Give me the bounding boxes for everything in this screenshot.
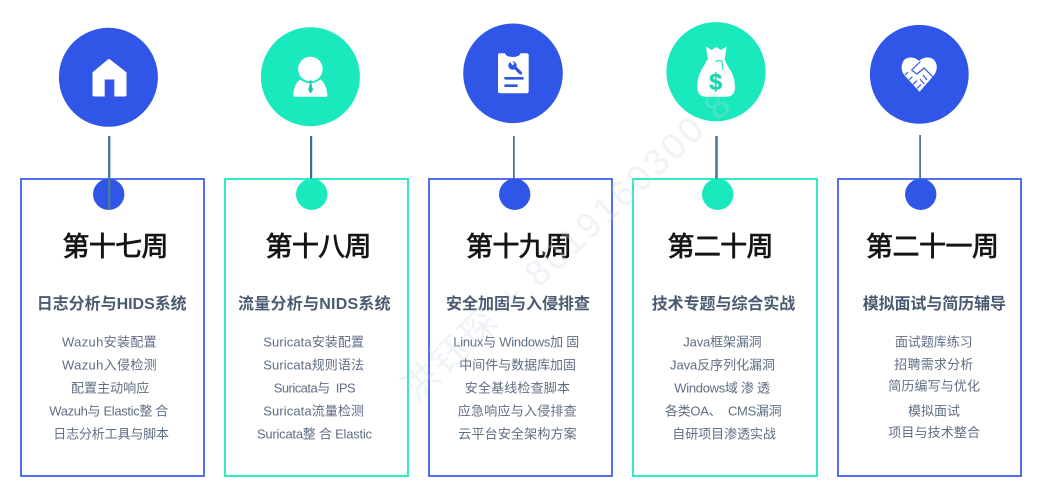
card: week 17 bbox=[21, 179, 204, 476]
icon circle: person bbox=[261, 27, 360, 126]
connector line bbox=[513, 136, 515, 180]
column: week 20 bbox=[633, 22, 817, 476]
topic list: 自研项目渗透实战 bbox=[672, 426, 776, 442]
icon circle: money bag: $ bbox=[709, 69, 722, 95]
topic list bbox=[453, 334, 579, 442]
connector dot bbox=[296, 179, 327, 210]
topic list: Suricata安装配置 bbox=[263, 334, 364, 350]
heading: week 17: 第十七周 bbox=[62, 232, 168, 262]
icon circle: home bbox=[59, 28, 158, 127]
topic list: 模拟面试 bbox=[908, 404, 960, 418]
topic list bbox=[257, 334, 372, 442]
connector dot bbox=[93, 179, 124, 210]
heading: week 18: 第十八周 bbox=[266, 232, 372, 262]
topic list: 招聘需求分析 bbox=[894, 357, 973, 372]
card: week 20 bbox=[633, 179, 817, 476]
icon circle: clipboard with wrench bbox=[463, 24, 563, 123]
topic list: 配置主动响应 bbox=[71, 380, 149, 396]
card: week 19 bbox=[429, 179, 612, 476]
topic list: 中间件与数据库加固 bbox=[459, 358, 576, 372]
column: week 17 bbox=[21, 28, 204, 476]
topic list bbox=[665, 334, 782, 442]
topic list: 安全基线检查脚本 bbox=[465, 380, 570, 396]
topic list: 面试题库练习 bbox=[895, 334, 973, 350]
column: week 21 bbox=[838, 25, 1021, 476]
topic list: 日志分析工具与脚本 bbox=[53, 426, 169, 442]
topic list: Wazuh与 Elastic整 合 bbox=[49, 404, 168, 418]
connector line bbox=[108, 136, 110, 210]
card: week 18 bbox=[225, 179, 408, 476]
heading: week 19: 第十九周 bbox=[466, 232, 572, 262]
topic list: Wazuh入侵检测 bbox=[62, 358, 157, 372]
connector dot bbox=[905, 179, 936, 210]
topic list: 项目与技术整合 bbox=[888, 425, 980, 440]
column: week 18 bbox=[225, 27, 408, 476]
subheading: 流量分析与NIDS系统 bbox=[238, 294, 391, 313]
topic list: 各类OA、 CMS漏洞 bbox=[665, 404, 782, 418]
topic list: Linux与 Windows加 固 bbox=[453, 334, 579, 350]
topic list bbox=[49, 334, 169, 442]
heading: week 21: 第二十一周 bbox=[866, 232, 999, 262]
connector line bbox=[919, 135, 921, 180]
topic list: 云平台安全架构方案 bbox=[458, 426, 577, 442]
connector line bbox=[310, 136, 312, 180]
subheading: 技术专题与综合实战 bbox=[652, 294, 795, 313]
topic list: Suricata整 合 Elastic bbox=[257, 426, 372, 442]
topic list: Wazuh安装配置 bbox=[62, 334, 157, 350]
topic list: Suricata与 IPS bbox=[274, 380, 356, 396]
card: week 21 bbox=[838, 179, 1021, 476]
subheading: 日志分析与HIDS系统 bbox=[37, 294, 187, 313]
topic list: Windows域 渗 透 bbox=[674, 380, 770, 396]
watermark: 洪钰琛 + 8019160300 8 bbox=[393, 84, 738, 409]
topic list bbox=[888, 334, 980, 440]
icon circle: handshake heart bbox=[870, 25, 969, 124]
connector dot bbox=[702, 179, 733, 210]
connector line bbox=[715, 136, 718, 180]
icon circle: money bag bbox=[666, 22, 766, 121]
connector dot bbox=[499, 179, 530, 210]
subheading: 安全加固与入侵排查 bbox=[446, 294, 590, 313]
topic list: 简历编写与优化 bbox=[888, 378, 980, 394]
topic list: Suricata流量检测 bbox=[263, 404, 364, 418]
topic list: Java反序列化漏洞 bbox=[670, 358, 775, 372]
topic list: Suricata规则语法 bbox=[263, 358, 364, 372]
topic list: Java框架漏洞 bbox=[683, 334, 762, 350]
topic list: 应急响应与入侵排查 bbox=[458, 404, 577, 418]
subheading: 模拟面试与简历辅导 bbox=[863, 294, 1006, 313]
column: week 19 bbox=[429, 24, 612, 476]
heading: week 20: 第二十周 bbox=[668, 232, 774, 262]
